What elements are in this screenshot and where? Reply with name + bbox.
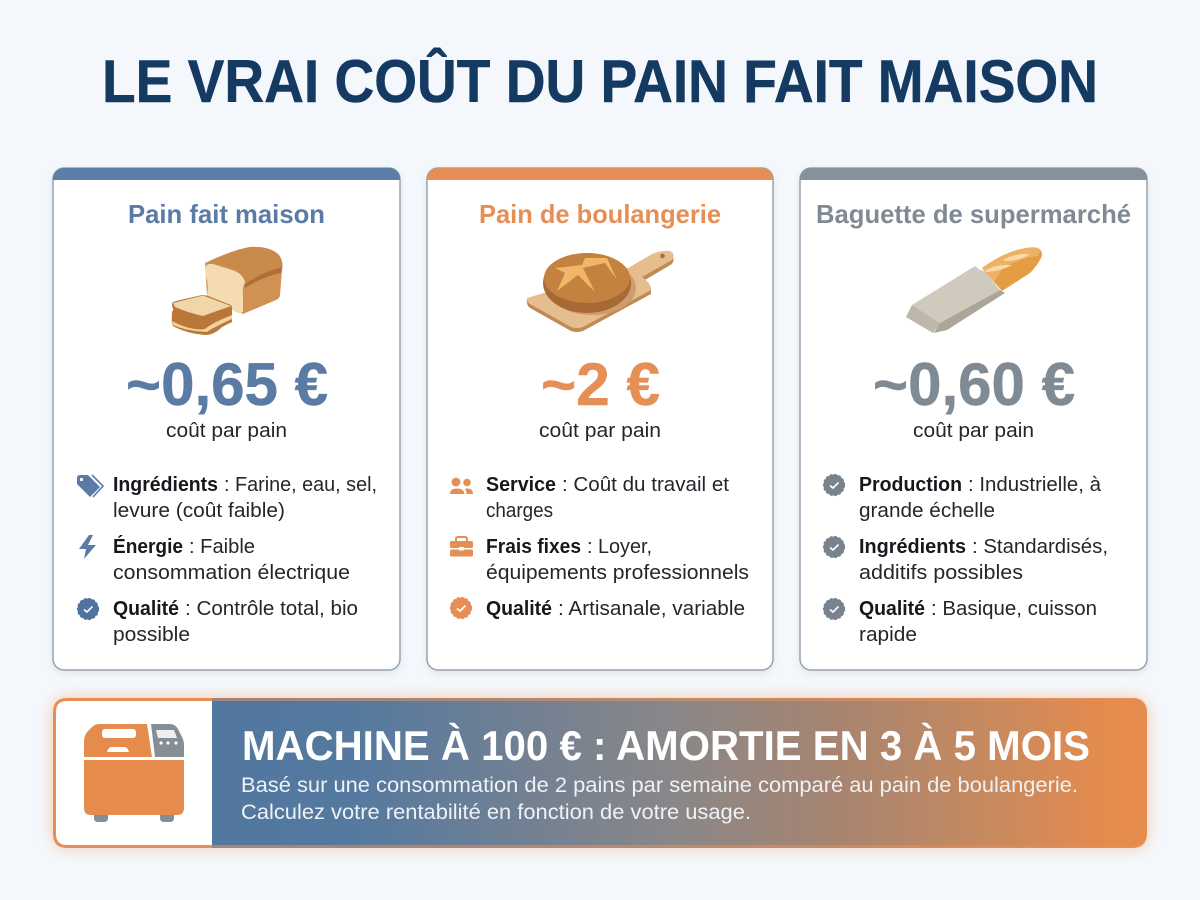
panel: baguette de supermarché: [800, 168, 1147, 673]
list: details: [824, 474, 1108, 646]
icon: check badge: [824, 536, 844, 558]
list: details: Frais fixes: [486, 536, 581, 558]
list: details: charges: [486, 500, 553, 522]
list: details: levure (coût faible): [113, 500, 285, 522]
list: details: possible: [113, 624, 190, 646]
price caption: coût par pain: [913, 420, 1034, 442]
list: details: : Artisanale, variable: [558, 598, 745, 620]
icon: briefcase: [450, 537, 473, 556]
list: details: Ingrédients: [859, 536, 966, 558]
list: details: équipements professionnels: [486, 562, 749, 584]
list: details: Production: [859, 474, 962, 496]
callout: machine amortization: [53, 698, 1147, 848]
price caption: coût par pain: [166, 420, 287, 442]
icon: loaf on board: [527, 251, 674, 332]
icon: quality badge: [450, 598, 472, 618]
price: ~2 €: [541, 351, 660, 418]
heading: pain de boulangerie: Pain de boulangerie: [479, 199, 721, 229]
list: details: : Standardisés,: [972, 536, 1108, 558]
price: ~0,65 €: [126, 351, 328, 418]
title: LE VRAI COÛT DU PAIN FAIT MAISON: [102, 48, 1098, 115]
icon: check badge: [824, 474, 844, 496]
list: details: Service: [486, 474, 556, 496]
list: details: additifs possibles: [859, 562, 1023, 584]
list: details: rapide: [859, 624, 917, 646]
callout text: Basé sur une consommation de 2 pains par semaine comparé au pain de boulangerie.: [241, 774, 1078, 797]
icon: tag: [77, 475, 103, 497]
list: details: : Coût du travail et: [562, 474, 729, 496]
panel: pain de boulangerie: [427, 168, 773, 673]
icon: sliced loaf: [172, 247, 283, 335]
icon: people: [450, 478, 473, 494]
list: details: grande échelle: [859, 500, 995, 522]
icon: bread machine: [84, 724, 184, 822]
icon: quality badge: [78, 598, 98, 620]
icon: baguette in paper bag: [906, 247, 1042, 333]
list: details: Ingrédients: [113, 474, 218, 496]
list: details: Qualité: [113, 598, 179, 620]
list: details: : Farine, eau, sel,: [224, 474, 377, 496]
callout text: Calculez votre rentabilité en fonction de votre usage.: [241, 801, 751, 824]
heading: pain fait maison: Pain fait maison: [128, 199, 325, 229]
list: details: : Faible: [189, 536, 255, 558]
heading: baguette de supermarché: Baguette de supermarché: [816, 199, 1131, 229]
list: details: : Loyer,: [587, 536, 652, 558]
list: details: [77, 474, 377, 646]
list: details: : Industrielle, à: [968, 474, 1102, 496]
icon: lightning bolt: [79, 535, 96, 559]
list: details: consommation électrique: [113, 562, 350, 584]
list: details: Qualité: [486, 598, 552, 620]
callout heading: MACHINE À 100 € : AMORTIE EN 3 À 5 MOIS: [242, 722, 1090, 769]
list: details: [450, 474, 749, 620]
list: details: Qualité: [859, 598, 925, 620]
callout text: [241, 774, 1078, 824]
panel: pain fait maison: [53, 168, 400, 673]
price: ~0,60 €: [873, 351, 1075, 418]
price caption: coût par pain: [539, 420, 661, 442]
icon: check badge: [824, 598, 844, 620]
list: details: Énergie: [113, 535, 183, 558]
list: details: : Basique, cuisson: [931, 598, 1097, 620]
list: details: : Contrôle total, bio: [185, 598, 358, 620]
